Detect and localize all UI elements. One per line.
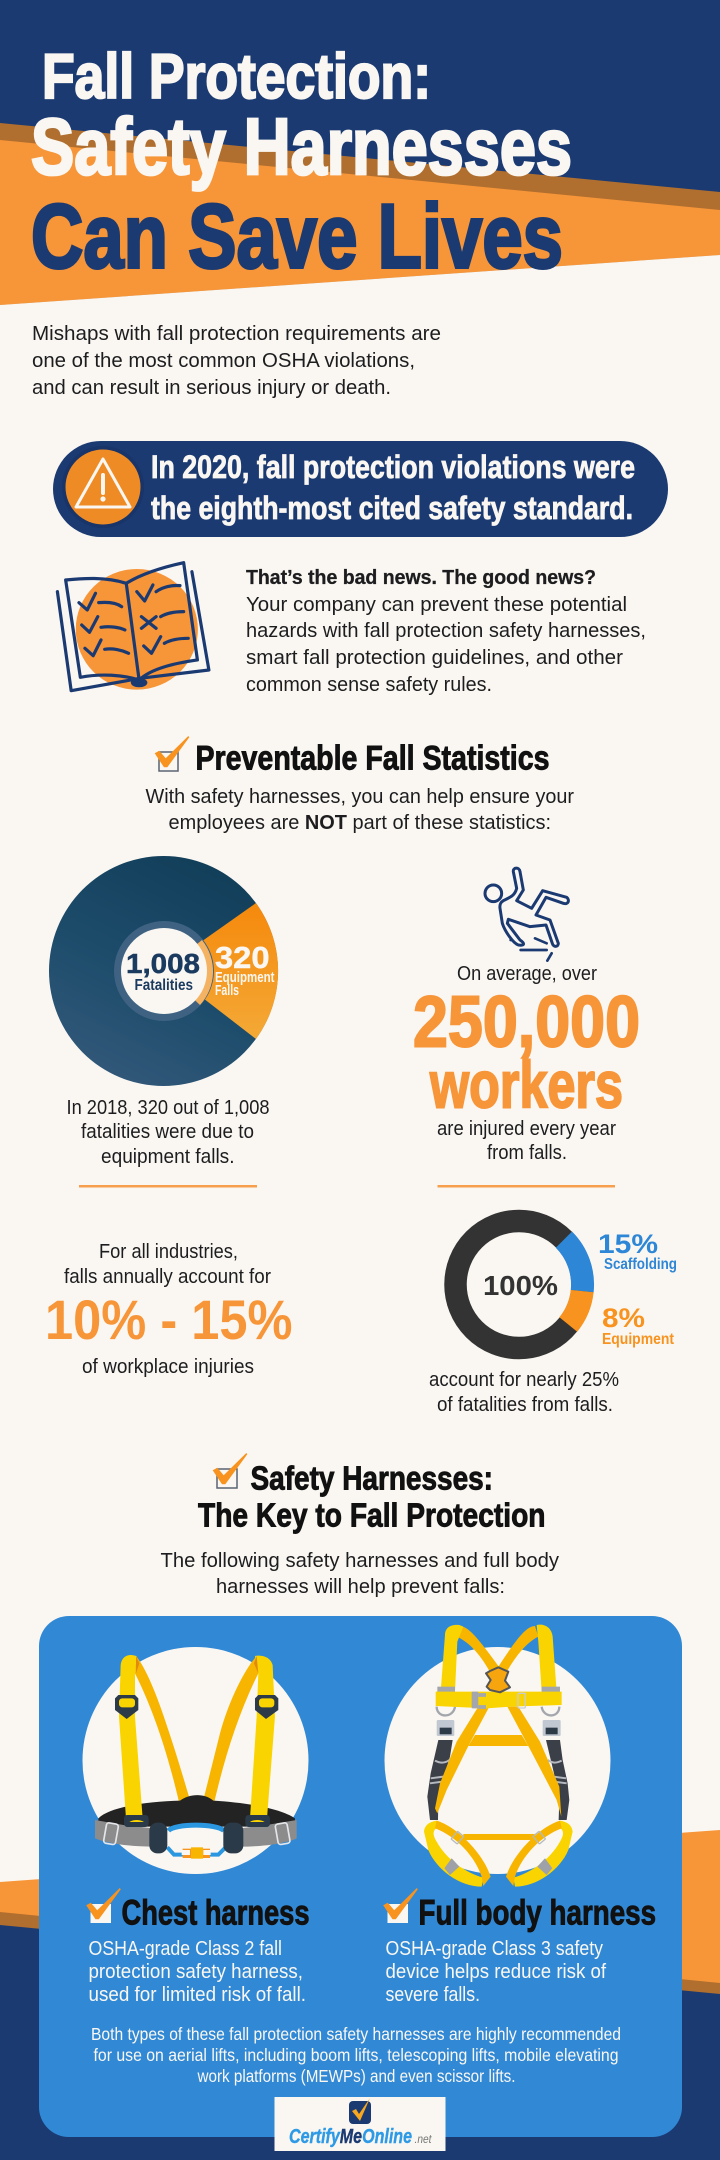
icon: checklist book xyxy=(57,563,209,691)
stat: 250,000 workers xyxy=(413,963,640,1164)
title: Fall Protection: xyxy=(42,42,431,112)
pie label: 1,008 fatalities: 1,008 xyxy=(126,948,200,979)
heading: the key to fall protection xyxy=(198,1453,546,1534)
icon: check mark xyxy=(155,736,189,771)
stat: 250,000 workers: 250,000 xyxy=(413,982,640,1062)
pie label: 1,008 fatalities: Fatalities xyxy=(134,977,193,994)
pie chart: fatalities xyxy=(49,856,278,1086)
pie label: 320 equipment falls: 320 xyxy=(215,940,270,975)
text block: aerial lifts note: for use on aerial lifts, including boom lifts, telescoping lifts, mobile elevating xyxy=(94,2045,618,2065)
icon: check mark xyxy=(383,1888,418,1923)
illustration: chest harness xyxy=(82,1647,308,1874)
legend: equipment: 8% xyxy=(602,1303,645,1333)
subheading text: With safety harnesses, you can help ensure your xyxy=(146,786,574,808)
block: chest harness: protection safety harness, xyxy=(88,1961,303,1983)
stat: 250,000 workers: On average, over xyxy=(457,963,597,985)
caption: donut chart xyxy=(429,1369,619,1416)
text block: aerial lifts note: work platforms (MEWPs) and even scissor lifts. xyxy=(197,2066,515,2086)
subheading text: employees are NOT part of these statistics: xyxy=(168,812,551,834)
leg loop left xyxy=(424,1821,491,1887)
icon: warning xyxy=(66,450,140,524)
icon: check mark xyxy=(86,1888,121,1923)
subheading text xyxy=(160,1550,559,1598)
intro text: one of the most common OSHA violations, xyxy=(32,350,415,372)
block: full body harness: OSHA-grade Class 3 safety xyxy=(386,1938,603,1960)
caption: pie chart xyxy=(66,1097,270,1168)
block: chest harness: Chest harness xyxy=(122,1894,310,1932)
stat: 250,000 workers: are injured every year xyxy=(437,1118,616,1140)
heading: the key to fall protection: Safety Harnesses: xyxy=(250,1460,493,1496)
caption: pie chart: fatalities were due to xyxy=(81,1121,254,1143)
logo: CertifyMeOnline: .net xyxy=(414,2132,432,2146)
stat: 10% - 15% xyxy=(45,1241,292,1378)
text block: aerial lifts note: Both types of these fall protection safety harnesses are highly recommended xyxy=(91,2024,621,2044)
callout: 2020 violations xyxy=(53,441,668,537)
header background xyxy=(0,0,720,306)
subheading text: The following safety harnesses and full body xyxy=(160,1550,559,1572)
caption: donut chart: of fatalities from falls. xyxy=(437,1394,613,1416)
pie label: 320 equipment falls: Falls xyxy=(215,982,239,999)
pie label: 320 equipment falls xyxy=(215,940,275,999)
legend: scaffolding: 15% xyxy=(598,1229,658,1259)
stat: 250,000 workers: from falls. xyxy=(487,1142,567,1164)
text block: good news: hazards with fall protection safety harnesses, xyxy=(246,620,646,642)
illustration: full body harness xyxy=(384,1625,610,1887)
callout text: the eighth-most cited safety standard. xyxy=(151,490,633,526)
caption: pie chart: equipment falls. xyxy=(101,1146,234,1168)
block: chest harness xyxy=(86,1888,310,2006)
donut chart xyxy=(456,1221,677,1348)
text block: good news xyxy=(246,567,646,696)
block: full body harness: Full body harness xyxy=(418,1894,656,1932)
heading: the key to fall protection: The Key to Fall Protection xyxy=(198,1496,546,1534)
text block: good news: That’s the bad news. The good news? xyxy=(246,567,596,589)
legend: equipment xyxy=(602,1303,674,1348)
block: full body harness: device helps reduce risk of xyxy=(386,1961,606,1983)
icon: check mark xyxy=(213,1453,247,1488)
legend: equipment: Equipment xyxy=(602,1331,674,1348)
panel: harness types xyxy=(39,1616,682,2137)
intro text: and can result in serious injury or death. xyxy=(32,377,391,399)
footer background xyxy=(0,1830,720,2160)
text block: good news: Your company can prevent these potential xyxy=(246,594,627,616)
title: Can Save Lives xyxy=(31,186,563,288)
intro text xyxy=(32,323,441,399)
icon: falling worker xyxy=(485,868,568,961)
leg loop right xyxy=(506,1821,573,1887)
pie label: 320 equipment falls: Equipment xyxy=(215,969,275,986)
stat: 250,000 workers: workers xyxy=(429,1048,623,1122)
stat: 10% - 15%: of workplace injuries xyxy=(82,1356,254,1378)
callout text: In 2020, fall protection violations were xyxy=(151,449,635,485)
block: chest harness: used for limited risk of fall. xyxy=(88,1984,306,2006)
intro text: Mishaps with fall protection requirements are xyxy=(32,323,441,345)
title xyxy=(31,42,572,288)
caption: donut chart: account for nearly 25% xyxy=(429,1369,619,1391)
logo: CertifyMeOnline xyxy=(274,2097,446,2151)
stat: 10% - 15%: For all industries, xyxy=(99,1241,238,1263)
pie label: 1,008 fatalities xyxy=(126,948,200,994)
donut centre label: 100% xyxy=(483,1270,558,1301)
block: full body harness: severe falls. xyxy=(386,1984,480,2006)
subheading text: harnesses will help prevent falls: xyxy=(216,1576,505,1598)
text block: good news: smart fall protection guidelines, and other xyxy=(246,647,623,669)
heading: preventable fall statistics: Preventable Fall Statistics xyxy=(196,740,550,778)
caption: pie chart: In 2018, 320 out of 1,008 xyxy=(66,1097,270,1119)
legend: scaffolding xyxy=(598,1229,677,1273)
callout text xyxy=(151,449,635,526)
text block: good news: common sense safety rules. xyxy=(246,674,492,696)
subheading text xyxy=(146,786,574,834)
logo: CertifyMeOnline: CertifyMeOnline xyxy=(289,2126,412,2148)
legend: scaffolding: Scaffolding xyxy=(604,1256,677,1273)
stat: 10% - 15%: falls annually account for xyxy=(64,1266,271,1288)
block: chest harness: OSHA-grade Class 2 fall xyxy=(88,1938,282,1960)
stat: 10% - 15%: 10% - 15% xyxy=(45,1288,292,1351)
title: Safety Harnesses xyxy=(31,102,572,191)
block: full body harness xyxy=(383,1888,656,2006)
text block: aerial lifts note xyxy=(91,2024,621,2086)
